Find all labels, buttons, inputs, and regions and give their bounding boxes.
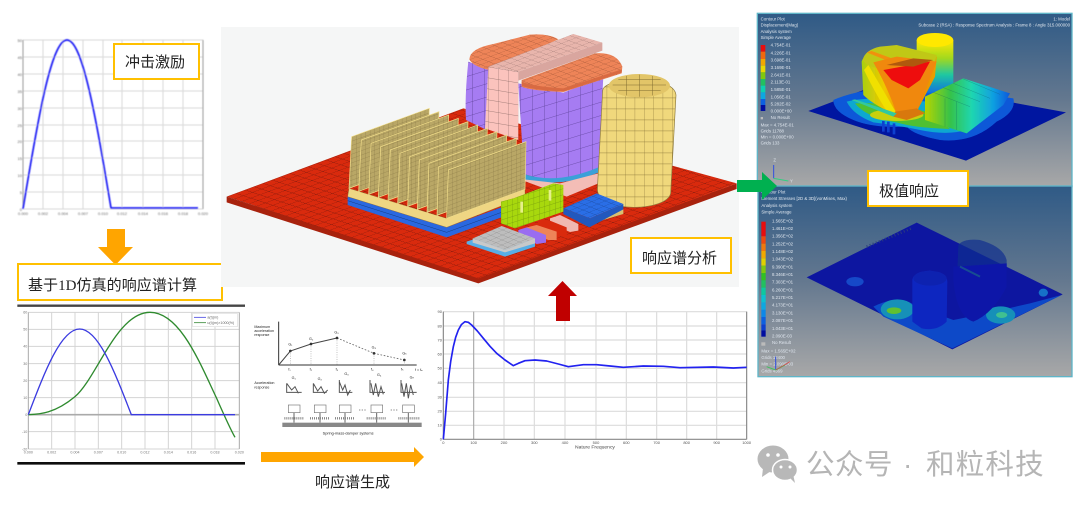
chart: 1D simulation time response: 50 — [23, 328, 27, 332]
chart: shock excitation pulse: 45 — [18, 55, 23, 60]
diagram: spring mass damper response spectrum principle: response — [254, 333, 269, 337]
diagram: spring mass damper response spectrum principle: G₂ — [309, 337, 314, 341]
diagram: spring mass damper response spectrum principle: G₄ — [377, 373, 382, 377]
chart: acceleration response spectrum: 80 — [438, 323, 443, 328]
label: extreme response: 极值响应 — [879, 182, 939, 200]
legend: stress scale: 1.356E+02 — [772, 234, 794, 239]
chart: shock excitation pulse: 5 — [20, 190, 23, 195]
chart: 1D simulation time response: 0.007 — [94, 451, 103, 455]
text: response spectrum generation: 响应谱生成 — [315, 473, 390, 491]
chart: shock excitation pulse: 0.007 — [78, 211, 89, 216]
arrow: right green — [737, 172, 777, 200]
legend: stress scale — [761, 189, 848, 373]
diagram: spring mass damper response spectrum principle: G₃ — [334, 330, 339, 334]
chart: 1D simulation time response — [17, 306, 245, 463]
legend: stress scale: 1.043E+02 — [772, 257, 794, 262]
diagram: spring mass damper response spectrum principle: Gₙ — [410, 375, 415, 379]
legend: stress scale: 1.252E+02 — [772, 241, 794, 246]
chart: acceleration response spectrum: 10 — [438, 423, 443, 428]
legend: stress scale: Grids 12400 — [761, 355, 786, 360]
chart: acceleration response spectrum: 40 — [438, 380, 443, 385]
legend: stress scale: No Result — [772, 340, 792, 345]
chart: 1D simulation time response: 30 — [23, 362, 27, 366]
legend: stress scale: Max = 1.565E+02 — [761, 349, 796, 354]
chart: shock excitation pulse: 0.002 — [38, 211, 49, 216]
chart: shock excitation pulse: 50 — [18, 38, 23, 43]
chart: 1D simulation time response: u(t)(m)×1000(%) — [207, 321, 234, 325]
chart: 1D simulation time response: 0.020 — [235, 451, 244, 455]
legend: stress scale: 6.260E+01 — [772, 287, 794, 292]
legend: stress scale: 8.346E+01 — [772, 272, 794, 277]
chart: shock excitation pulse: 0.018 — [178, 211, 189, 216]
arrow: down orange — [98, 229, 133, 265]
legend: displacement scale: Max = 4.754E-01 — [761, 122, 794, 127]
legend: displacement scale: Simple Average — [761, 35, 791, 40]
diagram: spring mass damper response spectrum principle: G₄ — [372, 345, 377, 349]
legend: displacement scale: Displacement(Mag) — [761, 23, 799, 28]
legend: displacement scale: Y — [790, 178, 793, 183]
chart: acceleration response spectrum: 400 — [562, 440, 569, 445]
transformer: core and coil — [466, 34, 622, 197]
legend: displacement scale: Contour Plot — [761, 16, 786, 21]
diagram: spring mass damper response spectrum principle: G₁ — [288, 343, 293, 347]
chart: 1D simulation time response: 10 — [23, 396, 27, 400]
legend: stress scale: 9.390E+01 — [772, 264, 794, 269]
heat sink: base — [348, 188, 525, 237]
panel: displacement contour plot — [757, 13, 1072, 187]
chart: 1D simulation time response: 20 — [23, 379, 27, 383]
chart: 1D simulation time response: 0.010 — [117, 451, 126, 455]
chart: acceleration response spectrum: 800 — [683, 440, 691, 445]
diagram: spring mass damper response spectrum principle: response — [254, 385, 269, 389]
legend: stress scale: 2.087E+01 — [772, 318, 794, 323]
chart: acceleration response spectrum: 30 — [438, 395, 443, 400]
legend: stress scale: Contour Plot — [761, 189, 786, 194]
panel: element stress contour plot — [758, 186, 1072, 377]
chart: shock excitation pulse: 0.000 — [18, 211, 29, 216]
legend: displacement scale: Analysis system — [761, 29, 792, 34]
diagram: spring mass damper response spectrum principle: Spring-mass-damper systems — [323, 431, 374, 435]
chart: shock excitation pulse: 0.010 — [98, 211, 109, 216]
chart: shock excitation pulse: 35 — [18, 89, 23, 94]
chart: acceleration response spectrum: 0 — [442, 440, 445, 445]
diagram: spring mass damper response spectrum principle: f₂ — [310, 367, 313, 371]
diagram: spring mass damper response spectrum principle: f₁ — [288, 367, 291, 371]
legend: displacement scale: 4.754E-01 — [771, 43, 791, 48]
arrow: up red — [548, 281, 577, 321]
label: response spectrum analysis: 响应谱分析 — [642, 249, 717, 267]
chart: shock excitation pulse: 15 — [18, 156, 23, 161]
legend: stress scale: Min = 2.090E-03 — [761, 362, 794, 367]
diagram: spring mass damper response spectrum principle: f₃ — [336, 367, 339, 371]
legend: stress scale: Element Stresses [2D & 3D](vonMises, Max) — [761, 196, 848, 201]
chart: acceleration response spectrum: Nature Frequency — [575, 445, 615, 451]
chart: 1D simulation time response: 0.004 — [70, 451, 80, 455]
chart: shock excitation pulse: 0.016 — [158, 211, 169, 216]
chart: acceleration response spectrum: 90 — [438, 309, 443, 314]
legend: stress scale: 1.565E+02 — [772, 218, 794, 223]
chart: 1D simulation time response: 0.016 — [187, 451, 196, 455]
chart: acceleration response spectrum: 700 — [653, 440, 661, 445]
diagram: spring mass damper response spectrum principle — [254, 322, 423, 435]
heat sink: fins — [349, 108, 526, 218]
chart: 1D simulation time response: 60 — [23, 311, 27, 315]
legend: displacement scale: 1: Model — [1053, 16, 1070, 21]
3D model: electronics board — [227, 34, 737, 283]
chart: acceleration response spectrum: 300 — [531, 440, 538, 445]
legend: displacement scale: 0.000E+00 — [771, 109, 792, 114]
legend: displacement scale: 5.282E-02 — [771, 102, 791, 107]
chart: 1D simulation time response: -20 — [22, 447, 27, 451]
legend: stress scale: 1.148E+02 — [772, 249, 794, 254]
chart: 1D simulation time response: 0.012 — [140, 451, 150, 455]
legend: stress scale: 2.090E-03 — [772, 334, 793, 339]
label: extreme response — [868, 171, 968, 206]
contour model: stress — [807, 223, 1063, 349]
legend: stress scale: 7.303E+01 — [772, 280, 794, 285]
chart: 1D simulation time response: 0.000 — [24, 451, 33, 455]
diagram: spring mass damper response spectrum principle: f = fₙ — [415, 368, 423, 372]
legend: displacement scale: 4.226E-01 — [771, 50, 791, 55]
legend: stress scale: 3.130E+01 — [772, 310, 794, 315]
chart: shock excitation pulse — [18, 38, 209, 216]
label: response spectrum calculation based on 1D simulation: 基于1D仿真的响应谱计算 — [28, 276, 197, 294]
legend: displacement scale: Subcase 2 (RSA) : Response Spectrum Analysis : Frame 8 : Angle 315.000000 — [918, 23, 1071, 28]
legend: displacement scale — [761, 16, 1071, 183]
chart: shock excitation pulse: 10 — [18, 173, 23, 178]
chart: shock excitation pulse: 20 — [18, 139, 23, 144]
chart: acceleration response spectrum: 600 — [623, 440, 630, 445]
watermark: WeChat account — [758, 446, 1045, 483]
diagram: spring mass damper response spectrum principle: G₂ — [318, 377, 323, 381]
chart: acceleration response spectrum: 900 — [713, 440, 721, 445]
legend: stress scale: Grids 4569 — [761, 368, 783, 373]
legend: displacement scale: Grids 133 — [761, 141, 780, 146]
label: shock excitation — [114, 44, 199, 79]
diagram: spring mass damper response spectrum principle: fₙ — [401, 367, 404, 371]
chart: 1D simulation time response: 0.002 — [47, 451, 56, 455]
legend: stress scale: 1.461E+02 — [772, 226, 794, 231]
chart: shock excitation pulse: 25 — [18, 123, 23, 128]
legend: displacement scale: 3.169E-01 — [771, 65, 791, 70]
diagram: spring mass damper response spectrum principle: f₄ — [371, 367, 374, 371]
chart: acceleration response spectrum — [438, 309, 752, 451]
capacitor: cylinder — [597, 74, 676, 207]
text: account name: 公众号 — [806, 449, 893, 481]
chart: shock excitation pulse: 0.014 — [138, 211, 149, 216]
diagram: spring mass damper response spectrum principle: Acceleration — [254, 381, 274, 385]
label: shock excitation: 冲击激励 — [125, 54, 185, 71]
legend: displacement scale: Grids 11788 — [761, 128, 785, 133]
legend: displacement scale: Min = 0.000E+00 — [761, 135, 794, 140]
diagram: spring mass damper response spectrum principle: Gₙ — [402, 351, 407, 355]
legend: stress scale: Analysis system — [761, 203, 793, 208]
chart: shock excitation pulse: 0.004 — [58, 211, 69, 216]
contour model: displacement — [808, 33, 1066, 161]
chart: 1D simulation time response: 0 — [25, 413, 27, 417]
chart: 1D simulation time response: 0.014 — [164, 451, 173, 455]
icon: WeChat bubbles — [758, 446, 798, 483]
chart: shock excitation pulse: 0.020 — [198, 211, 209, 216]
legend: displacement scale: Z — [773, 158, 776, 163]
chart: acceleration response spectrum: 50 — [438, 366, 443, 371]
diagram: spring mass damper response spectrum principle: acceleration — [254, 329, 274, 333]
chart: acceleration response spectrum: 500 — [593, 440, 600, 445]
chart: acceleration response spectrum: 100 — [470, 440, 478, 445]
chart: 1D simulation time response: -10 — [22, 430, 27, 434]
label: response spectrum analysis — [631, 238, 731, 273]
chart: shock excitation pulse: 40 — [18, 72, 23, 77]
chart: acceleration response spectrum: 0 — [440, 437, 443, 442]
chart: acceleration response spectrum: 20 — [438, 409, 443, 414]
chart: 1D simulation time response: a(t)(m) — [207, 316, 218, 320]
legend: stress scale: 1.043E+01 — [772, 326, 794, 331]
legend: displacement scale: No Result — [771, 115, 790, 120]
legend: stress scale: 4.173E+01 — [772, 303, 794, 308]
legend: displacement scale: 2.641E-01 — [771, 72, 791, 77]
chart: acceleration response spectrum: 200 — [501, 440, 508, 445]
chart: shock excitation pulse: 0.012 — [117, 211, 128, 216]
chart: 1D simulation time response: 0.018 — [210, 451, 220, 455]
label: response spectrum calculation based on 1D simulation — [18, 264, 222, 300]
text: company name: 和粒科技 — [926, 449, 1045, 481]
legend: displacement scale: 2.113E-01 — [771, 80, 791, 85]
small blocks: chips and connectors — [467, 183, 623, 257]
arrow: right orange — [261, 447, 424, 467]
chart: acceleration response spectrum: 70 — [438, 337, 443, 342]
chart: acceleration response spectrum: 1000 — [742, 440, 752, 445]
diagram: spring mass damper response spectrum principle: G₃ — [344, 372, 349, 376]
diagram: spring mass damper response spectrum principle: G₁ — [292, 376, 297, 380]
panel: finite element model — [221, 27, 739, 287]
legend: displacement scale: 1.056E-01 — [771, 94, 791, 99]
board: circuit board — [227, 108, 737, 283]
legend: displacement scale: 3.698E-01 — [771, 58, 791, 63]
chart: acceleration response spectrum: 60 — [438, 351, 443, 356]
diagram: spring mass damper response spectrum principle: Maximum — [254, 325, 270, 329]
legend: stress scale: Simple Average — [761, 210, 792, 215]
chart: shock excitation pulse: 30 — [18, 106, 23, 111]
chart: shock excitation pulse: 0 — [20, 207, 23, 212]
legend: stress scale: 5.217E+01 — [772, 295, 794, 300]
legend: displacement scale: 1.585E-01 — [771, 87, 791, 92]
text: separator dot: · — [903, 449, 912, 480]
chart: 1D simulation time response: 40 — [23, 345, 27, 349]
